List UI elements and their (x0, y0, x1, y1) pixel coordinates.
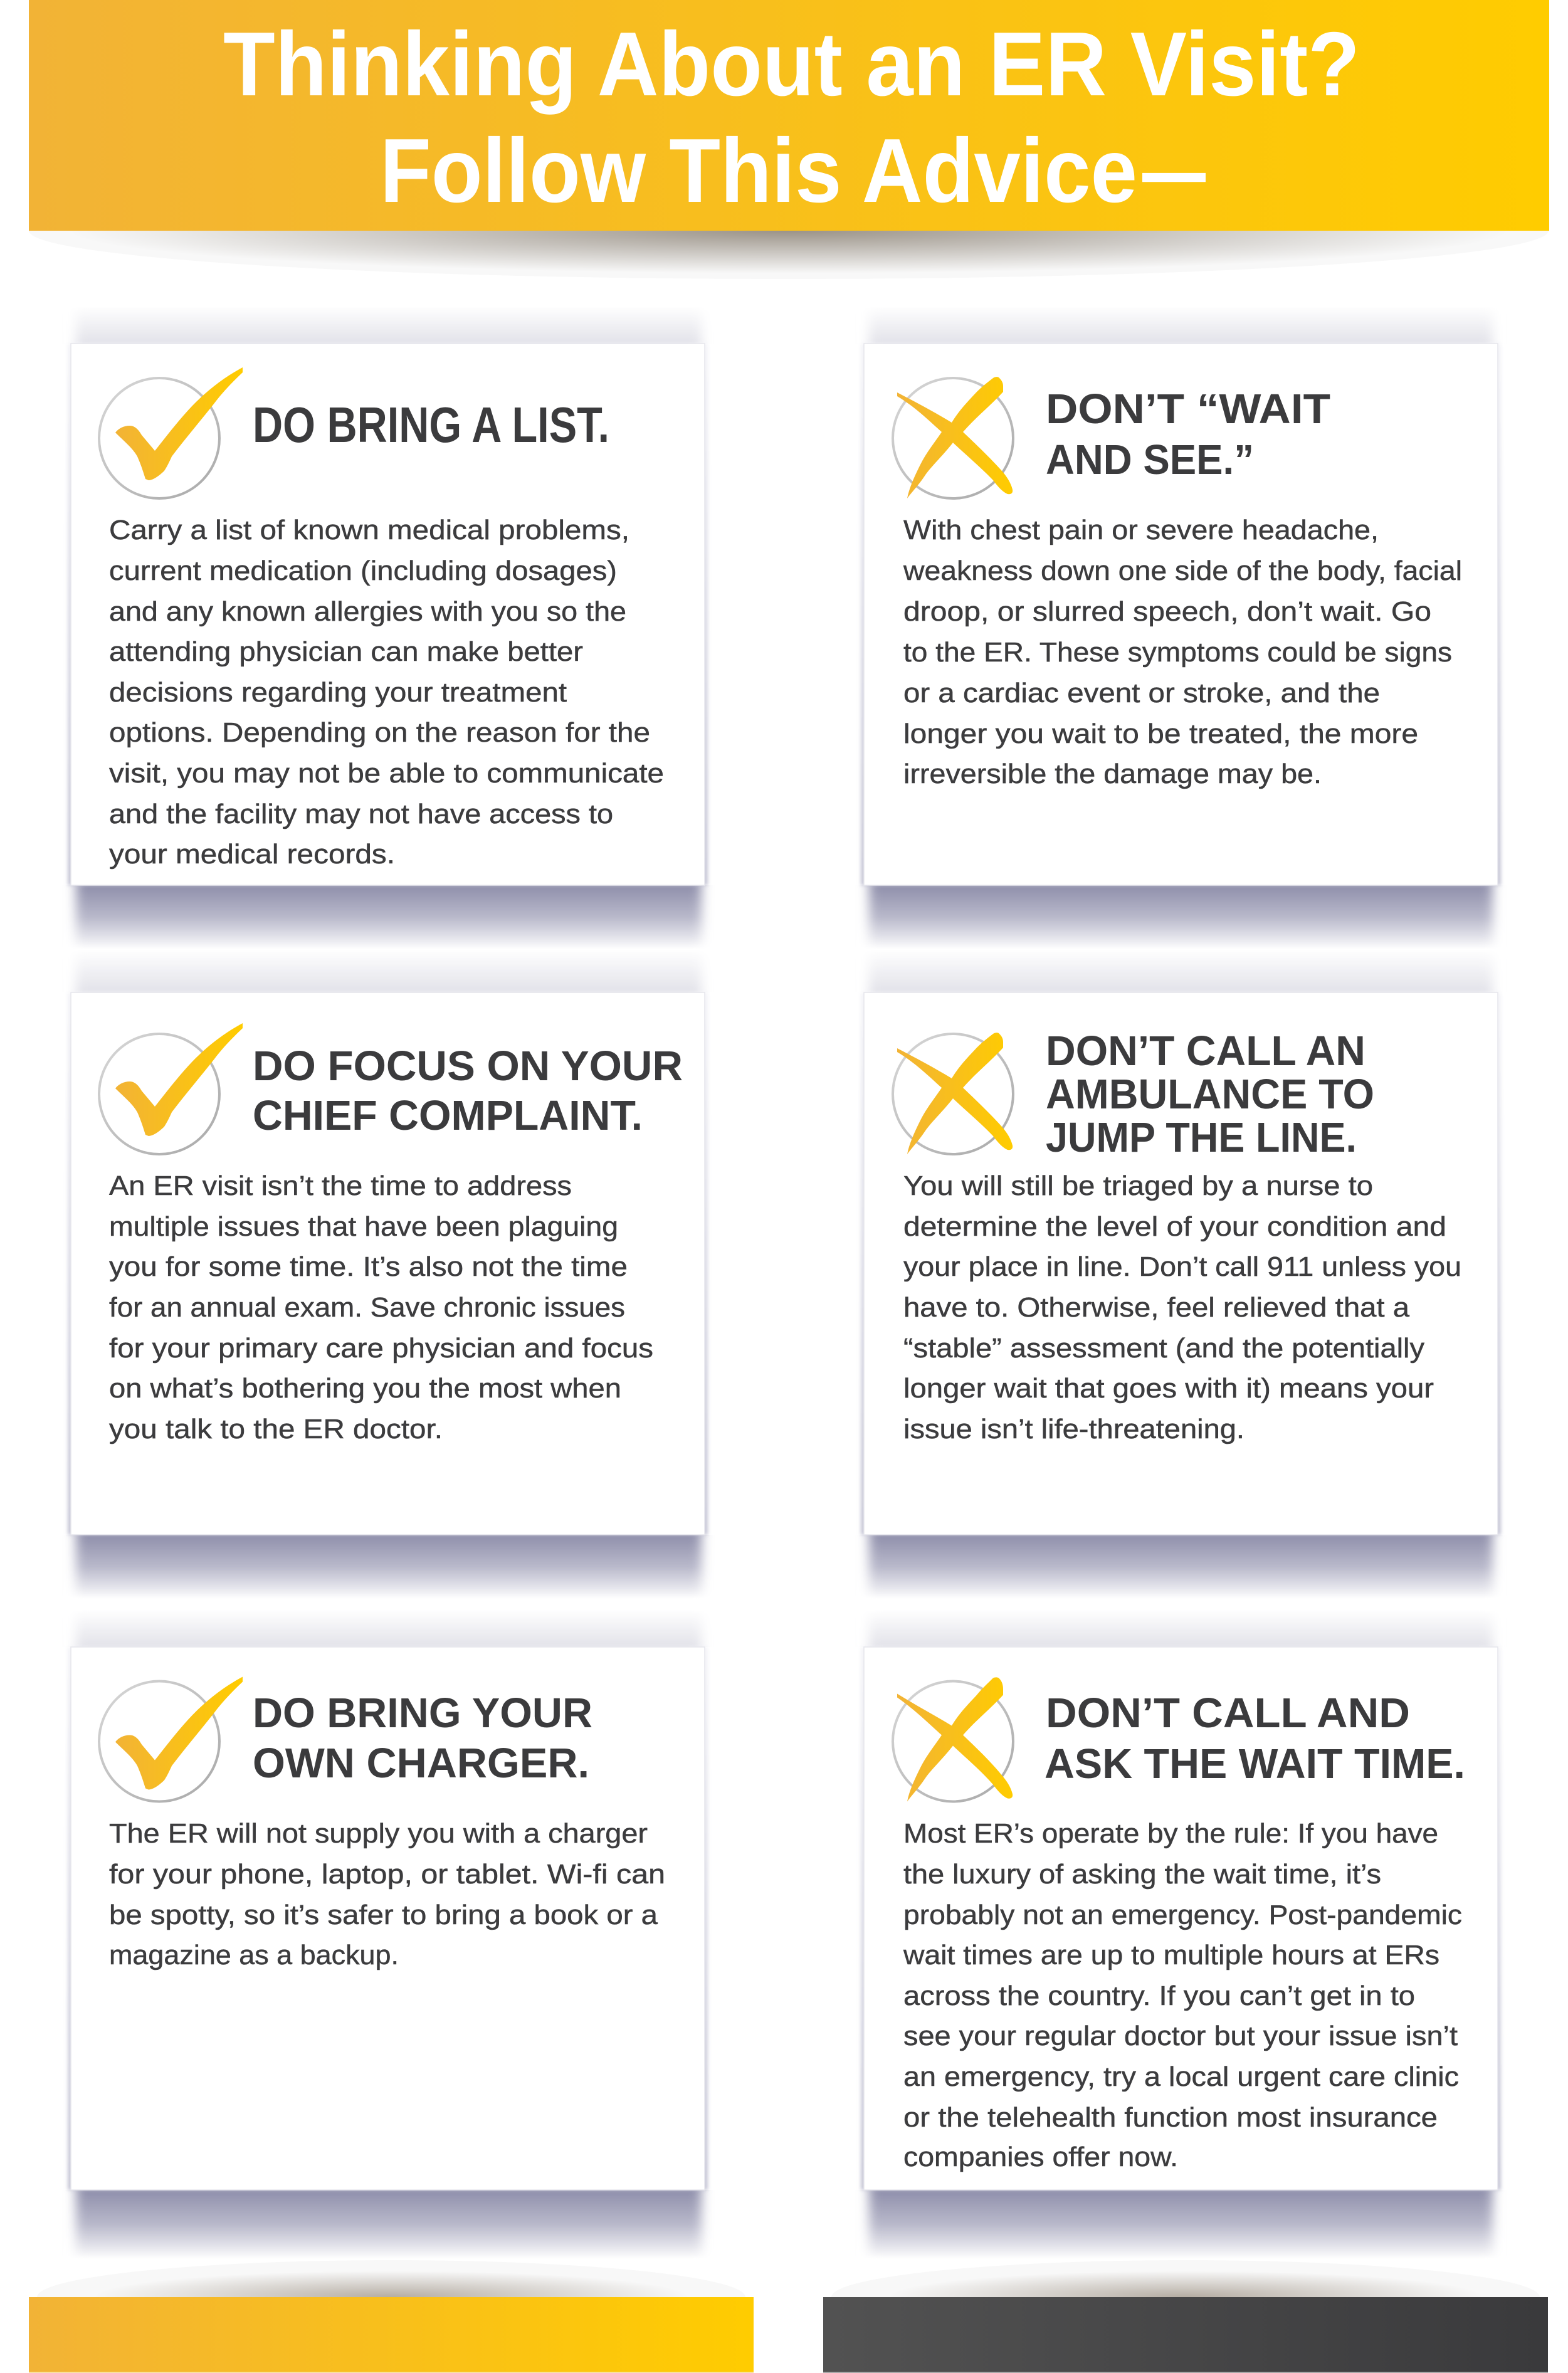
body text: magazine as a backup. (109, 1940, 399, 1970)
heading (1046, 386, 1330, 483)
title (223, 13, 1360, 221)
body text: Carry a list of known medical problems, (109, 515, 629, 545)
body text: be spotty, so it’s safer to bring a book or a (109, 1900, 658, 1930)
footer bar: dark (823, 2260, 1548, 2373)
body text (109, 1171, 653, 1444)
body text: With chest pain or severe headache, (903, 515, 1379, 545)
card background (71, 344, 705, 885)
body text: you talk to the ER doctor. (109, 1414, 443, 1444)
body text (109, 515, 664, 870)
body text: longer wait that goes with it) means your (903, 1373, 1434, 1404)
panel: don't call an ambulance (861, 949, 1501, 1599)
body text (903, 1818, 1462, 2172)
panel: do focus on your chief complaint (68, 949, 708, 1599)
heading: DO FOCUS ON YOUR (253, 1043, 683, 1090)
body text: irreversible the damage may be. (903, 759, 1322, 789)
icon: x mark (893, 1033, 1013, 1154)
heading (1044, 1690, 1465, 1787)
bar shadow (831, 2260, 1540, 2334)
heading: DON’T “WAIT (1046, 386, 1330, 433)
body text: determine the level of your condition and (903, 1211, 1446, 1242)
card background (71, 992, 705, 1535)
body text: current medication (including dosages) (109, 555, 617, 586)
card shadow (68, 1609, 708, 2259)
heading: DO BRING YOUR (253, 1690, 592, 1737)
heading: ASK THE WAIT TIME. (1044, 1740, 1465, 1787)
icon: x mark (893, 1677, 1013, 1802)
body text: or the telehealth function most insurance (903, 2102, 1438, 2133)
title: — (1142, 120, 1206, 221)
heading: JUMP THE LINE. (1046, 1114, 1357, 1161)
heading: CHIEF COMPLAINT. (253, 1092, 643, 1139)
card shadow (861, 306, 1501, 949)
panel: don't call and ask the wait time (861, 1609, 1501, 2259)
heading: AND SEE.” (1046, 436, 1254, 483)
body text: or a cardiac event or stroke, and the (903, 678, 1380, 708)
body text (903, 1171, 1461, 1444)
heading: DON’T CALL AND (1046, 1690, 1410, 1737)
body text: decisions regarding your treatment (109, 677, 567, 708)
heading (1046, 1028, 1374, 1161)
icon: check mark (99, 1676, 243, 1802)
body text: your medical records. (109, 839, 395, 870)
card shadow (861, 949, 1501, 1599)
body text: for your primary care physician and focus (109, 1333, 653, 1364)
heading (253, 1690, 592, 1787)
body text: and the facility may not have access to (109, 799, 613, 829)
heading (253, 1043, 683, 1139)
card background (864, 992, 1498, 1535)
body text: visit, you may not be able to communicate (109, 758, 664, 789)
body text: droop, or slurred speech, don’t wait. Go (903, 596, 1431, 627)
heading: AMBULANCE TO (1046, 1071, 1374, 1118)
card shadow (68, 949, 708, 1599)
heading: DON’T CALL AN (1046, 1028, 1365, 1075)
icon: check mark (99, 1023, 243, 1154)
bar fill (823, 2297, 1548, 2372)
body text: multiple issues that have been plaguing (109, 1211, 618, 1242)
body text: for your phone, laptop, or tablet. Wi-fi can (109, 1859, 665, 1890)
body text: your place in line. Don’t call 911 unless you (903, 1251, 1461, 1282)
body text: companies offer now. (903, 2142, 1178, 2172)
body text: weakness down one side of the body, facial (903, 555, 1462, 586)
body text: “stable” assessment (and the potentially (903, 1333, 1424, 1364)
card background (864, 344, 1498, 885)
footer bar: yellow (29, 2260, 754, 2373)
title: Thinking About an ER Visit? (223, 13, 1360, 115)
body text: probably not an emergency. Post-pandemic (903, 1900, 1462, 1930)
bar shadow (37, 2260, 745, 2334)
title: Follow This Advice (380, 120, 1137, 221)
body text: attending physician can make better (109, 636, 583, 667)
body text: issue isn’t life-threatening. (903, 1414, 1244, 1444)
body text: an emergency, try a local urgent care clinic (903, 2061, 1459, 2092)
icon: check mark (99, 367, 243, 498)
body text: longer you wait to be treated, the more (903, 718, 1418, 749)
bar fill (29, 2297, 754, 2372)
card shadow (68, 306, 708, 949)
card background (864, 1647, 1498, 2190)
body text: you for some time. It’s also not the time (109, 1251, 628, 1282)
body text (903, 515, 1462, 789)
body text: on what’s bothering you the most when (109, 1373, 621, 1404)
body text (109, 1818, 665, 1970)
card background (71, 1647, 705, 2190)
panel: do bring a list (68, 306, 708, 949)
body text: across the country. If you can’t get in to (903, 1981, 1415, 2011)
body text: see your regular doctor but your issue isn’t (903, 2021, 1458, 2051)
panel: do bring your own charger (68, 1609, 708, 2259)
body text: wait times are up to multiple hours at ERs (903, 1940, 1439, 1970)
icon: x mark (893, 377, 1013, 498)
body text: have to. Otherwise, feel relieved that a (903, 1292, 1410, 1323)
body text: An ER visit isn’t the time to address (109, 1171, 572, 1201)
body text: options. Depending on the reason for the (109, 717, 650, 748)
heading: OWN CHARGER. (253, 1740, 589, 1787)
body text: You will still be triaged by a nurse to (903, 1171, 1373, 1201)
banner background (29, 0, 1549, 231)
header banner (29, 0, 1549, 279)
body text: The ER will not supply you with a charger (109, 1818, 648, 1849)
card shadow (861, 1609, 1501, 2259)
banner shadow (29, 182, 1549, 279)
body text: for an annual exam. Save chronic issues (109, 1292, 625, 1323)
body text: and any known allergies with you so the (109, 596, 626, 627)
body text: to the ER. These symptoms could be signs (903, 637, 1452, 668)
body text: Most ER’s operate by the rule: If you have (903, 1818, 1438, 1849)
body text: the luxury of asking the wait time, it’s (903, 1859, 1381, 1890)
heading: DO BRING A LIST. (253, 397, 609, 453)
panel: don't wait and see (861, 306, 1501, 949)
